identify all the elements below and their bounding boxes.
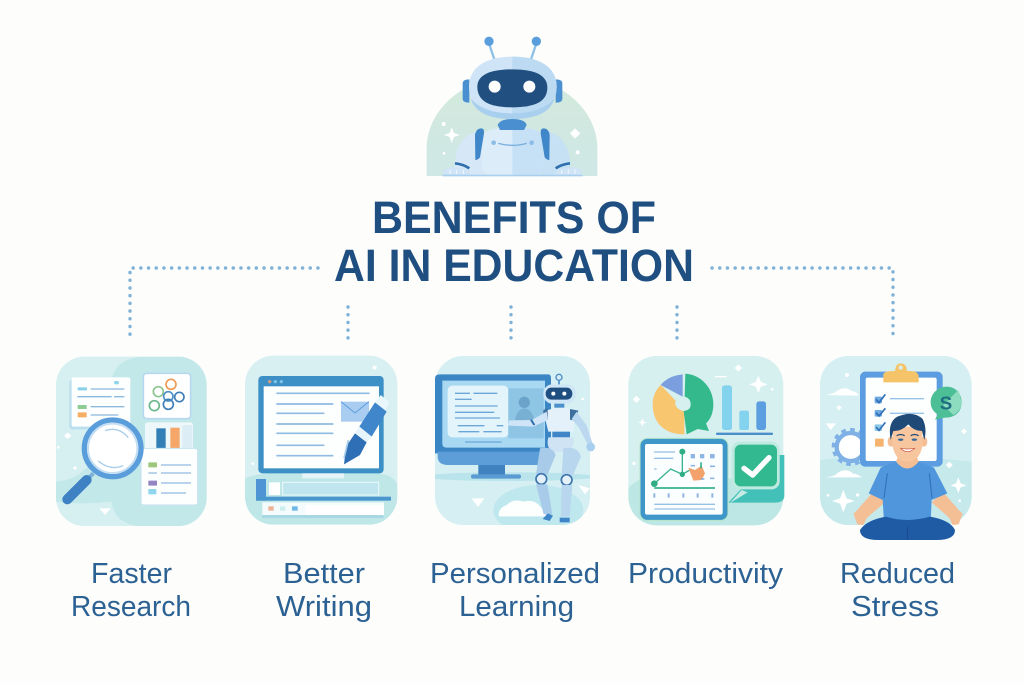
icon: robot mascot (427, 37, 597, 176)
label: better writing: Writing (276, 591, 372, 623)
icon: magnifying glass (67, 420, 141, 499)
title: BENEFITS OF (372, 192, 656, 243)
icon: green check speech bubble (728, 442, 784, 503)
icon: gear (833, 430, 868, 464)
illustration: meditating person (853, 414, 963, 540)
illustration: cloud (499, 501, 549, 516)
label: faster research (71, 558, 191, 623)
illustration: document (69, 377, 130, 429)
label: reduced stress: Reduced (840, 558, 955, 590)
panel: reduced stress (820, 356, 972, 540)
illustration: keyboard and book (256, 479, 391, 518)
panel: productivity (628, 356, 784, 525)
labels: card captions (71, 558, 955, 623)
panel: better writing (245, 356, 397, 525)
label: faster research: Research (71, 591, 191, 623)
title (334, 192, 694, 291)
illustration: clipboard checklist (860, 363, 943, 467)
chart: pie chart speech bubble (653, 374, 713, 434)
icon: dollar speech bubble: S (940, 393, 952, 414)
illustration: line chart report (640, 438, 728, 520)
label: reduced stress (840, 558, 955, 623)
illustration: desktop monitor (435, 374, 551, 479)
label: faster research: Faster (91, 558, 172, 590)
label: productivity: Productivity (628, 558, 784, 590)
illustration: teaching robot (508, 374, 595, 522)
illustration: network chart (143, 373, 191, 419)
label: reduced stress: Stress (851, 591, 939, 623)
label: better writing (276, 558, 372, 623)
illustration: computer monitor with text (258, 376, 384, 478)
icon: dollar speech bubble (931, 387, 962, 420)
title: AI IN EDUCATION (334, 240, 694, 291)
chart: bar chart (716, 385, 773, 435)
panel: personalized learning (435, 356, 595, 525)
label: personalized learning: Personalized (430, 558, 600, 590)
label: personalized learning (430, 558, 600, 623)
connector: dotted lines from title to cards (130, 268, 893, 338)
label: better writing: Better (283, 558, 365, 590)
label: personalized learning: Learning (459, 591, 574, 623)
icon: fountain pen (344, 395, 389, 464)
panel: faster research (56, 357, 207, 526)
illustration: bar chart and list (141, 422, 198, 505)
